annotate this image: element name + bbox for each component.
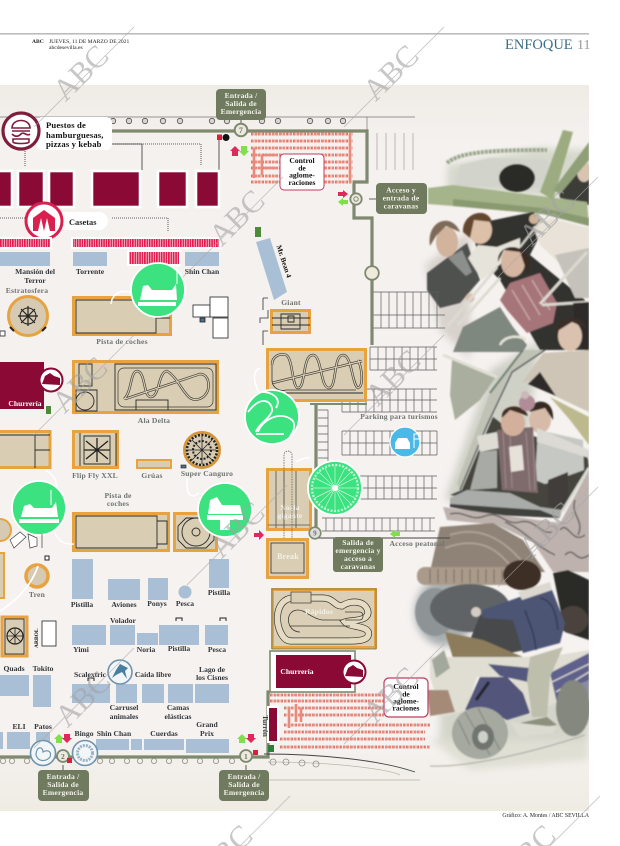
left bar and wash xyxy=(443,355,497,377)
panel: maze control top xyxy=(251,134,353,182)
pista de coches 1: Pista de coches xyxy=(96,337,148,346)
break: Break xyxy=(277,552,299,561)
icon: carousel horse xyxy=(108,660,132,684)
page header: ABC xyxy=(32,39,44,45)
noria box xyxy=(268,470,310,530)
big track ride xyxy=(268,350,366,400)
Ala Delta: Ala Delta xyxy=(138,416,170,425)
pista de coches 2: coches xyxy=(107,499,129,508)
Ala Delta xyxy=(74,362,218,425)
smoke xyxy=(414,588,449,636)
churreria 1 xyxy=(0,362,62,414)
page header: JUEVES, 11 DE MARZO DE 2021 xyxy=(49,39,129,45)
oval walkway xyxy=(284,451,292,569)
giant: Giant xyxy=(281,298,301,307)
entrance 7 xyxy=(216,89,266,156)
bumper xyxy=(427,690,455,716)
seat behind boy xyxy=(553,570,589,640)
quad xyxy=(445,632,523,658)
noria box: Noria xyxy=(280,503,300,512)
attraction labels: Pesca xyxy=(208,645,226,654)
rapidos xyxy=(272,589,376,649)
pista de coches 2 xyxy=(74,491,216,550)
ABC watermarks: ABC xyxy=(356,660,425,729)
attraction labels: Pistilla xyxy=(208,588,230,597)
boy xyxy=(503,560,541,590)
super canguro: Super Canguro xyxy=(181,469,233,478)
attraction labels: Tokito xyxy=(33,664,54,673)
attraction labels: Pistilla xyxy=(168,644,190,653)
control de aglomeraciones bottom xyxy=(384,678,428,717)
burger stalls heading xyxy=(3,113,112,150)
exit 9: 9 xyxy=(313,530,317,538)
grey cushion xyxy=(450,490,562,518)
girl in striped dress xyxy=(500,273,557,333)
entrance 1: Emergencia xyxy=(224,788,264,797)
icon: bingo wheel xyxy=(72,740,98,766)
control de aglomeraciones top xyxy=(280,154,324,190)
attraction labels: Cuerdas xyxy=(150,729,178,738)
page header xyxy=(0,33,590,53)
acceso caravanas: Acceso y xyxy=(386,186,416,194)
road network xyxy=(0,117,450,780)
entrance 1 xyxy=(219,734,269,801)
green ride frame xyxy=(427,184,589,218)
sister xyxy=(535,430,584,484)
flip fly xyxy=(72,432,118,480)
Estratosfera: Estratosfera xyxy=(6,286,48,295)
wheel xyxy=(452,707,508,759)
page header: ENFOQUE xyxy=(505,37,573,53)
blue attractions xyxy=(0,559,229,753)
top row labels: Terror xyxy=(24,276,46,285)
turron: Turrón xyxy=(261,715,269,737)
giant xyxy=(260,298,310,345)
entrance 7: Emergencia xyxy=(221,107,261,116)
top row labels: Torrente xyxy=(76,267,105,276)
man/boy in suit xyxy=(427,243,480,308)
attraction labels: Shin Chan xyxy=(97,729,132,738)
green grey seat xyxy=(453,307,527,352)
attraction labels: Grand xyxy=(196,720,219,729)
top row labels: Shin Chan xyxy=(185,267,220,276)
fence trees top xyxy=(110,118,346,124)
boy in white shirt xyxy=(468,238,520,280)
ABC watermarks: ABC xyxy=(358,343,427,412)
exit 9: Salida de xyxy=(342,538,374,547)
attraction labels: los Cisnes xyxy=(196,673,228,682)
attraction labels: Carrusel xyxy=(110,703,138,712)
gruas xyxy=(137,460,171,480)
credit: Gráfico: A. Montes / ABC SEVILLA xyxy=(502,812,590,819)
gruas: Grúas xyxy=(141,471,163,480)
control de aglomeraciones bottom: aglome- xyxy=(393,696,419,706)
background track xyxy=(447,150,547,163)
turron xyxy=(261,706,279,752)
control de aglomeraciones bottom: de xyxy=(402,690,410,698)
exit 9: caravanas xyxy=(341,562,375,571)
attraction labels: Noria xyxy=(137,645,155,654)
ABC watermarks: ABC xyxy=(46,38,115,107)
acceso caravanas xyxy=(338,183,427,214)
attraction labels: Prix xyxy=(200,729,214,738)
churreria 1: Churrería xyxy=(8,399,42,408)
exit 9 xyxy=(309,527,445,572)
icon: duck xyxy=(30,740,56,766)
attraction labels: Yimi xyxy=(73,645,89,654)
exit 9: Acceso peatonal xyxy=(389,539,445,548)
fence trees bottom xyxy=(0,758,319,767)
attraction labels: Volador xyxy=(110,616,137,625)
pista de coches 1 xyxy=(74,298,170,346)
attraction labels: Caída libre xyxy=(135,670,172,679)
green circle: bumper car mid xyxy=(12,470,74,544)
flip fly: Flip Fly XXL xyxy=(72,471,118,480)
ABC watermarks: ABC xyxy=(356,38,425,107)
lower-left rides: Tren xyxy=(29,590,46,599)
green circle: bumper car top xyxy=(111,263,185,317)
maze control bottom xyxy=(270,695,430,747)
attraction labels: Pistilla xyxy=(71,600,93,609)
green marker xyxy=(255,227,261,237)
attraction labels: Quads xyxy=(3,664,25,673)
dome xyxy=(430,523,545,572)
pista de coches 2: Pista de xyxy=(104,491,132,500)
entrance 7: Salida de xyxy=(225,99,257,108)
attraction labels: Patos xyxy=(34,722,52,731)
parking icon and label xyxy=(360,412,438,457)
ABC watermarks: ABC xyxy=(202,495,271,564)
attraction labels xyxy=(3,588,230,738)
ABC watermarks: ABC xyxy=(512,183,581,252)
control de aglomeraciones top: aglome- xyxy=(289,170,315,180)
casetas heading: Casetas xyxy=(69,218,97,227)
dinosaur texture xyxy=(443,470,589,572)
casetas heading xyxy=(26,203,108,239)
entrance 1: Salida de xyxy=(228,780,260,789)
green circle: ferris wheel xyxy=(296,458,362,515)
attraction labels: Pesca xyxy=(176,599,194,608)
dark interior behind people xyxy=(470,212,589,350)
entrance 1: Entrada / xyxy=(228,772,261,781)
page header: abcdesevilla.es xyxy=(49,45,83,51)
ABC watermarks: ABC xyxy=(202,183,271,252)
noria box: gigante xyxy=(277,511,303,520)
churreria 2 xyxy=(270,651,366,692)
attraction labels: animales xyxy=(110,712,138,721)
control de aglomeraciones top: de xyxy=(298,164,306,172)
Estratosfera xyxy=(0,286,48,336)
top row labels xyxy=(0,252,220,285)
attraction labels: Lago de xyxy=(199,665,226,674)
entrance 2: Entrada / xyxy=(47,772,80,781)
diagonal log side xyxy=(457,350,543,490)
scarf xyxy=(550,397,589,445)
control de aglomeraciones top: raciones xyxy=(288,178,316,187)
burger stalls heading: Puestos de xyxy=(46,120,86,130)
boy legs xyxy=(527,647,563,717)
exit 9: emergencia y xyxy=(335,546,381,555)
exit 9: acceso a xyxy=(344,554,372,563)
burger stalls heading: pizzas y kebab xyxy=(46,139,102,149)
ABC watermarks: ABC xyxy=(45,350,114,419)
entrance 2: 2 xyxy=(61,752,65,761)
rapidos: Rápidos xyxy=(305,607,333,616)
attraction labels: elásticas xyxy=(164,712,192,721)
ABC watermarks: ABC xyxy=(48,664,117,733)
parking icon and label: Parking para turismos xyxy=(360,412,438,421)
lower-left rides: ARBOL xyxy=(34,628,40,648)
attraction labels: Ponys xyxy=(147,599,167,608)
control de aglomeraciones bottom: raciones xyxy=(392,704,420,712)
break xyxy=(254,530,308,578)
Mr Bean 4: Mr. Bean 4 xyxy=(275,244,293,279)
entrance 2: Emergencia xyxy=(43,788,83,797)
lead lines xyxy=(0,120,376,770)
control de aglomeraciones bottom: Control xyxy=(393,682,419,691)
attraction labels: ELI xyxy=(12,722,26,731)
page header: 11 xyxy=(577,38,590,53)
churreria 2: Churrería xyxy=(280,667,314,676)
dark hair behind beam xyxy=(499,164,535,192)
screaming girl xyxy=(573,302,589,352)
top row labels: Mansión del xyxy=(15,267,55,276)
acceso caravanas: caravanas xyxy=(384,202,418,210)
Mr Bean 4 xyxy=(256,238,293,300)
green circle: bumper car right xyxy=(187,478,252,537)
flamenca girl xyxy=(477,432,500,452)
outlined buildings xyxy=(193,297,228,338)
acceso caravanas: entrada de xyxy=(383,194,420,202)
panel: maroon stalls xyxy=(0,171,219,207)
green circle: rollercoaster xyxy=(245,368,299,444)
parking grids xyxy=(318,133,445,531)
entrance 2 xyxy=(38,734,89,801)
burger stalls heading: hamburguesas, xyxy=(46,130,104,140)
photo collage: children on fairground rides xyxy=(415,130,591,770)
left box xyxy=(0,432,50,468)
panel: red casetas bars xyxy=(0,237,221,266)
attraction labels: Scalextric xyxy=(74,670,107,679)
attraction labels: Camas xyxy=(167,703,189,712)
control de aglomeraciones top: Control xyxy=(289,156,315,165)
entrance 1: 1 xyxy=(244,752,248,761)
super canguro xyxy=(181,432,233,478)
entrance 7: Entrada / xyxy=(225,91,258,100)
junction circle xyxy=(365,266,379,280)
interior dark xyxy=(450,417,589,512)
attraction labels: Aviones xyxy=(111,600,137,609)
ABC watermarks: ABC xyxy=(512,495,581,564)
attraction labels: Bingo xyxy=(74,729,94,738)
lower-left rides xyxy=(0,519,56,656)
sleeve woman in white xyxy=(533,218,589,264)
entrance 2: Salida de xyxy=(47,780,79,789)
entrance 7: 7 xyxy=(239,126,243,135)
white rails xyxy=(466,266,502,314)
